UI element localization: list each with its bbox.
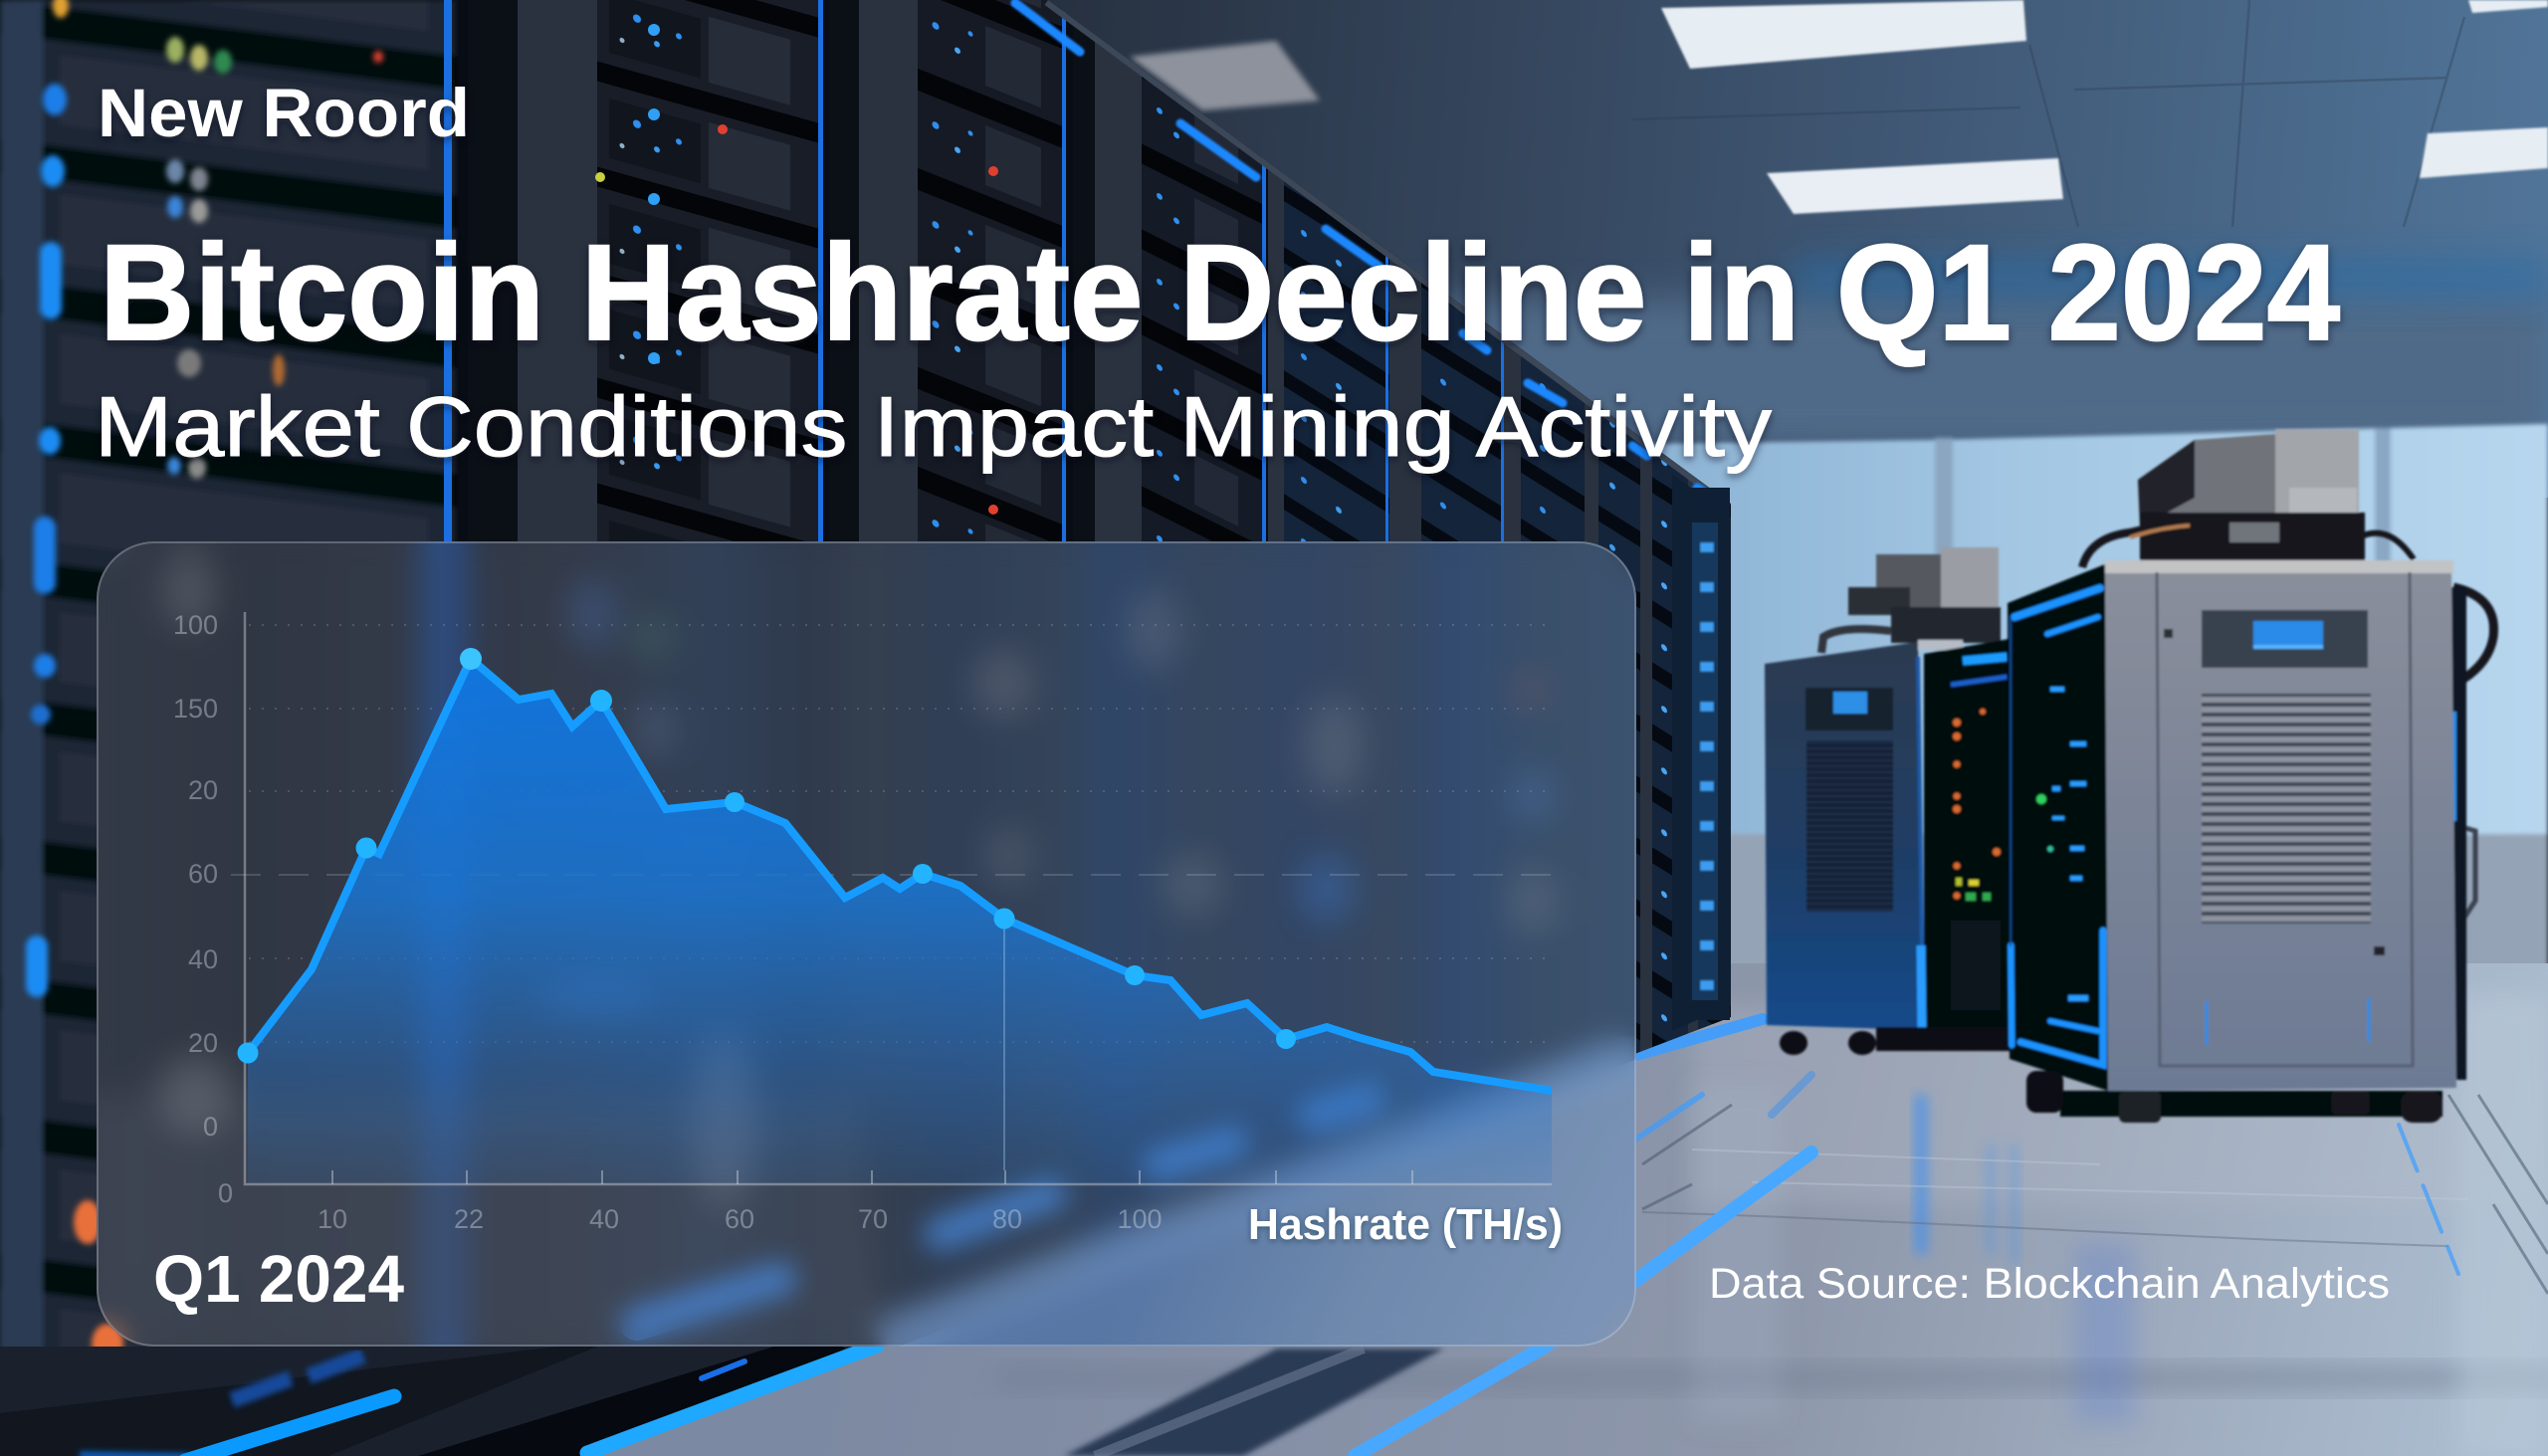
- chart: y axis labels: 150: [173, 694, 218, 724]
- rack top blue glows: [1015, 3, 1722, 503]
- rack status lights: [26, 0, 383, 1393]
- kicker: New Roord: New Roord: [98, 75, 470, 151]
- chart: x axis labels: 80: [992, 1204, 1022, 1234]
- cables and side rail: [2453, 587, 2494, 685]
- subtitle: Market Conditions Impact Mining Activity: [95, 380, 1773, 475]
- chart: y axis labels: 20: [188, 775, 218, 805]
- chart: y axis labels: 0: [203, 1112, 218, 1142]
- top hardware: [1821, 547, 2001, 653]
- period label: Q1 2024: [153, 1242, 404, 1317]
- chart: area under hashrate line: [248, 659, 1552, 1184]
- chart: x axis labels: [318, 1204, 1163, 1234]
- top hardware: [2082, 429, 2414, 567]
- chart: x axis labels: 10: [318, 1204, 347, 1234]
- rack base and lower glow: [0, 1347, 852, 1456]
- x axis title: Hashrate (TH/s): [1248, 1200, 1563, 1249]
- chart: x axis labels: 70: [858, 1204, 888, 1234]
- ceiling with light panels: [0, 0, 2548, 498]
- chart: x axis labels: 40: [589, 1204, 619, 1234]
- rack vertical blue lights: [444, 0, 1504, 541]
- polished floor: [498, 963, 2548, 1456]
- chart: gridlines: [231, 625, 1552, 1042]
- chart: axes and ticks: [245, 612, 1552, 1184]
- chart: y axis labels: 60: [188, 859, 218, 889]
- data source note: Data Source: Blockchain Analytics: [1709, 1260, 2390, 1308]
- server rack row: [0, 0, 1792, 1456]
- chart: y axis labels: [173, 610, 233, 1208]
- neon frame: [2011, 588, 2103, 1065]
- chart: y axis labels: 0: [218, 1178, 233, 1208]
- chart: x axis labels: 60: [725, 1204, 754, 1234]
- large mining unit: [2008, 429, 2494, 1123]
- chart: x axis labels: 22: [454, 1204, 484, 1234]
- chart: hashrate line: [248, 659, 1552, 1091]
- chart: x axis labels: 100: [1117, 1204, 1163, 1234]
- title: Bitcoin Hashrate Decline in Q1 2024: [100, 217, 2340, 369]
- floor light strips: [1355, 1019, 2458, 1456]
- panel: glass hashrate chart card: [97, 541, 1636, 1347]
- chart: y axis labels: 40: [188, 944, 218, 974]
- chart: data points: [237, 648, 1296, 1063]
- chart: y axis labels: 100: [173, 610, 218, 640]
- right rack edge: [1672, 474, 1731, 1031]
- back wall and windows: [1493, 424, 2548, 968]
- small mining unit: [1765, 547, 2020, 1055]
- rack posts: [518, 0, 1698, 1052]
- rack streaks seen through glass: [90, 533, 1642, 1353]
- floor reflections behind panel: [637, 1099, 1369, 1324]
- chart: y axis labels: 20: [188, 1028, 218, 1058]
- floor edge light strip: [587, 1346, 877, 1453]
